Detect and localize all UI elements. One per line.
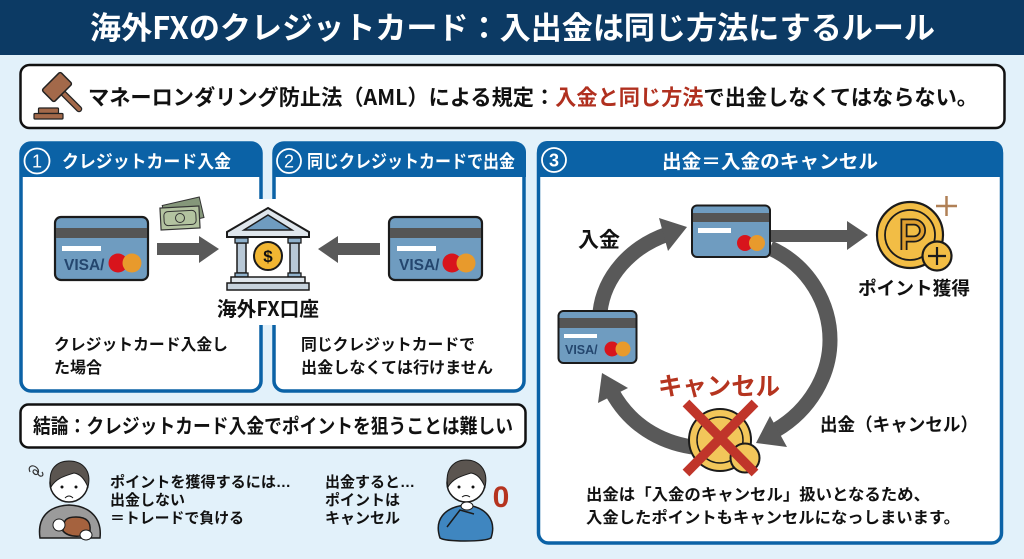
conclusion banner: 結論：クレジットカード入金でポイントを狙うことは難しい (33, 415, 513, 438)
step 1 number (24, 148, 50, 174)
text: how to earn points: ポイントを獲得するには… (110, 473, 291, 491)
cancel label: キャンセル (658, 373, 780, 401)
icon: point coin (877, 196, 957, 270)
title: 海外FXのクレジットカード：入出金は同じ方法にするルール (90, 3, 935, 48)
step 2 description: 出金しなくては行けません (301, 358, 493, 377)
arrow: to points (770, 221, 868, 250)
text: points cancelled on withdrawal: ポイントは (325, 492, 400, 509)
text: points cancelled on withdrawal: キャンセル (325, 510, 400, 527)
icon: credit card left (55, 217, 148, 280)
step 2 number (277, 149, 301, 173)
step 3 number: 3 (549, 150, 559, 170)
panel: step 3 withdrawal equals cancellation (537, 141, 1003, 543)
step 2 number: 2 (284, 152, 294, 172)
arrow: cancellation arc (598, 373, 692, 447)
step 1 number: 1 (32, 152, 42, 172)
text: how to earn points: 出金しない (110, 491, 185, 509)
arrow: deposit arc (600, 218, 687, 312)
deposit label: 入金 (578, 229, 620, 252)
step 3 number (542, 148, 566, 172)
step 3 explanation: 入金したポイントもキャンセルになっしまいます。 (586, 508, 960, 527)
panel: step 2 same card withdrawal (272, 142, 526, 391)
panel: step 1 credit card deposit (20, 142, 262, 391)
rule text: マネーロンダリング防止法（AML）による規定：入金と同じ方法で出金しなくてはならない。 (88, 81, 978, 112)
icon: credit card right: VISA/ (399, 257, 440, 274)
text: points cancelled on withdrawal: 出金すると… (325, 473, 415, 491)
icon: banknotes (160, 197, 204, 230)
text: how to earn points: ＝トレードで負ける (110, 509, 244, 527)
arrow: card to account (157, 236, 219, 263)
conclusion banner (20, 404, 526, 448)
arrow: withdrawal arc (756, 248, 830, 447)
icon: credit card top (692, 206, 770, 257)
icon: credit card right (389, 217, 482, 280)
icon: bank (227, 208, 309, 290)
withdrawal label: 出金（キャンセル） (820, 415, 978, 435)
icon: credit card left: VISA/ (64, 257, 105, 274)
point earned label: ポイント獲得 (858, 278, 970, 299)
step 3 heading: 出金＝入金のキャンセル (662, 151, 878, 173)
icon: gavel (34, 72, 79, 119)
title (0, 0, 1024, 55)
step 1 description: クレジットカード入金し (54, 335, 228, 354)
icon: cancelled coin (686, 403, 760, 473)
icon: credit card left: VISA/ (565, 343, 598, 357)
icon: worried man with purse (29, 461, 100, 540)
arrow: account from right card (318, 236, 380, 263)
zero points: 0 (493, 481, 509, 514)
step 1 heading: クレジットカード入金 (62, 152, 231, 172)
icon: bank: $ (263, 247, 273, 266)
step 2 heading: 同じクレジットカードで出金 (307, 152, 515, 172)
step 1 description: た場合 (54, 359, 102, 377)
account label: 海外FX口座 (217, 293, 319, 322)
rule banner (20, 65, 1004, 128)
icon: thinking man (438, 460, 493, 541)
step 3 explanation: 出金は「入金のキャンセル」扱いとなるため、 (586, 485, 930, 504)
icon: credit card left (558, 311, 636, 363)
step 2 description: 同じクレジットカードで (301, 336, 475, 354)
